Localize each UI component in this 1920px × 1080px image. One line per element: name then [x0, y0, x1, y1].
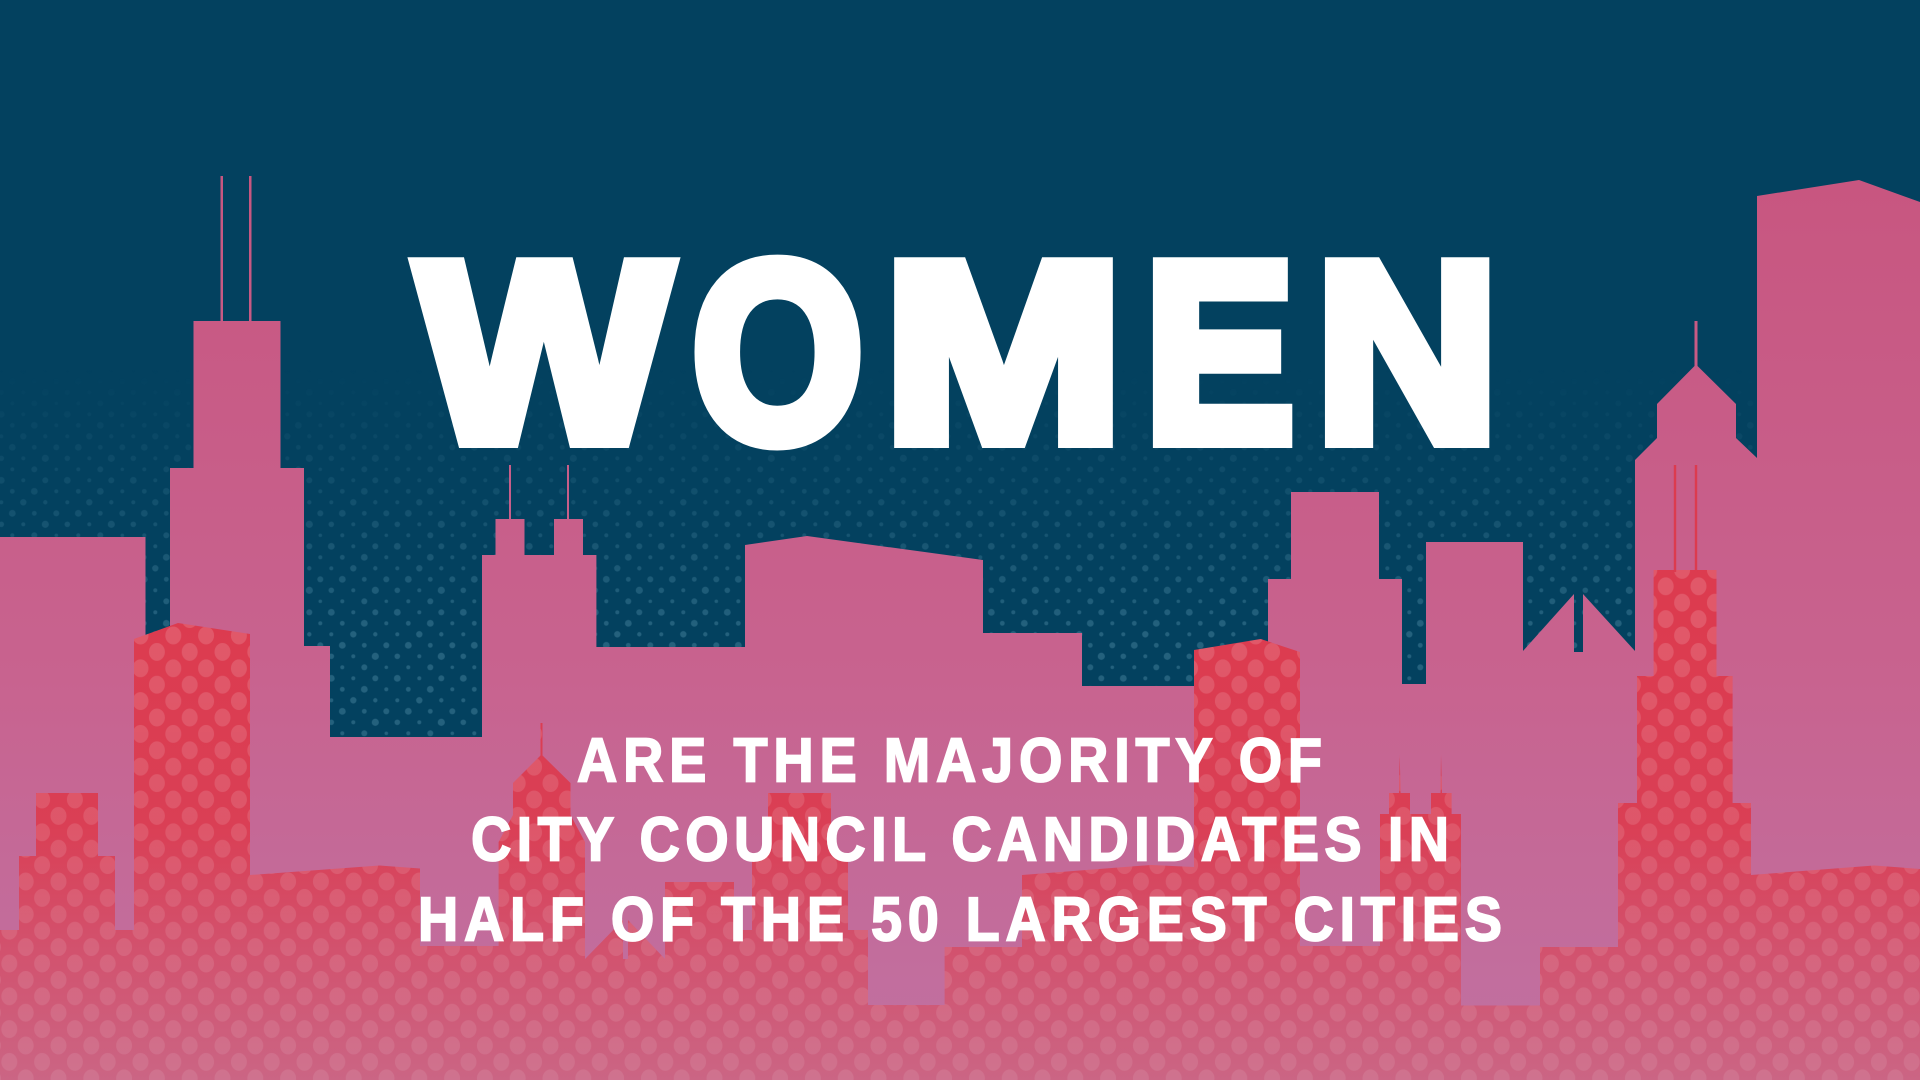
title: WOMEN: O: [692, 210, 863, 494]
title: WOMEN: W: [418, 210, 670, 494]
dotted halftone sky texture: [0, 444, 1752, 736]
front skyline dot pattern: [0, 570, 1920, 1080]
front skyline fill: [0, 570, 1920, 1080]
subtitle line 2: CITY COUNCIL CANDIDATES IN: [471, 806, 1449, 874]
title: WOMEN: [418, 210, 1498, 494]
title: WOMEN: M: [884, 210, 1123, 494]
front tower antennas: [1675, 465, 1696, 572]
subtitle line 1: ARE THE MAJORITY OF: [577, 727, 1322, 795]
subtitle text block: [418, 727, 1502, 954]
title: WOMEN: N: [1316, 210, 1498, 494]
front skyline silhouette in red with dots: [0, 465, 1920, 1080]
subtitle line 3: HALF OF THE 50 LARGEST CITIES: [418, 886, 1502, 954]
title: WOMEN: E: [1145, 210, 1294, 494]
